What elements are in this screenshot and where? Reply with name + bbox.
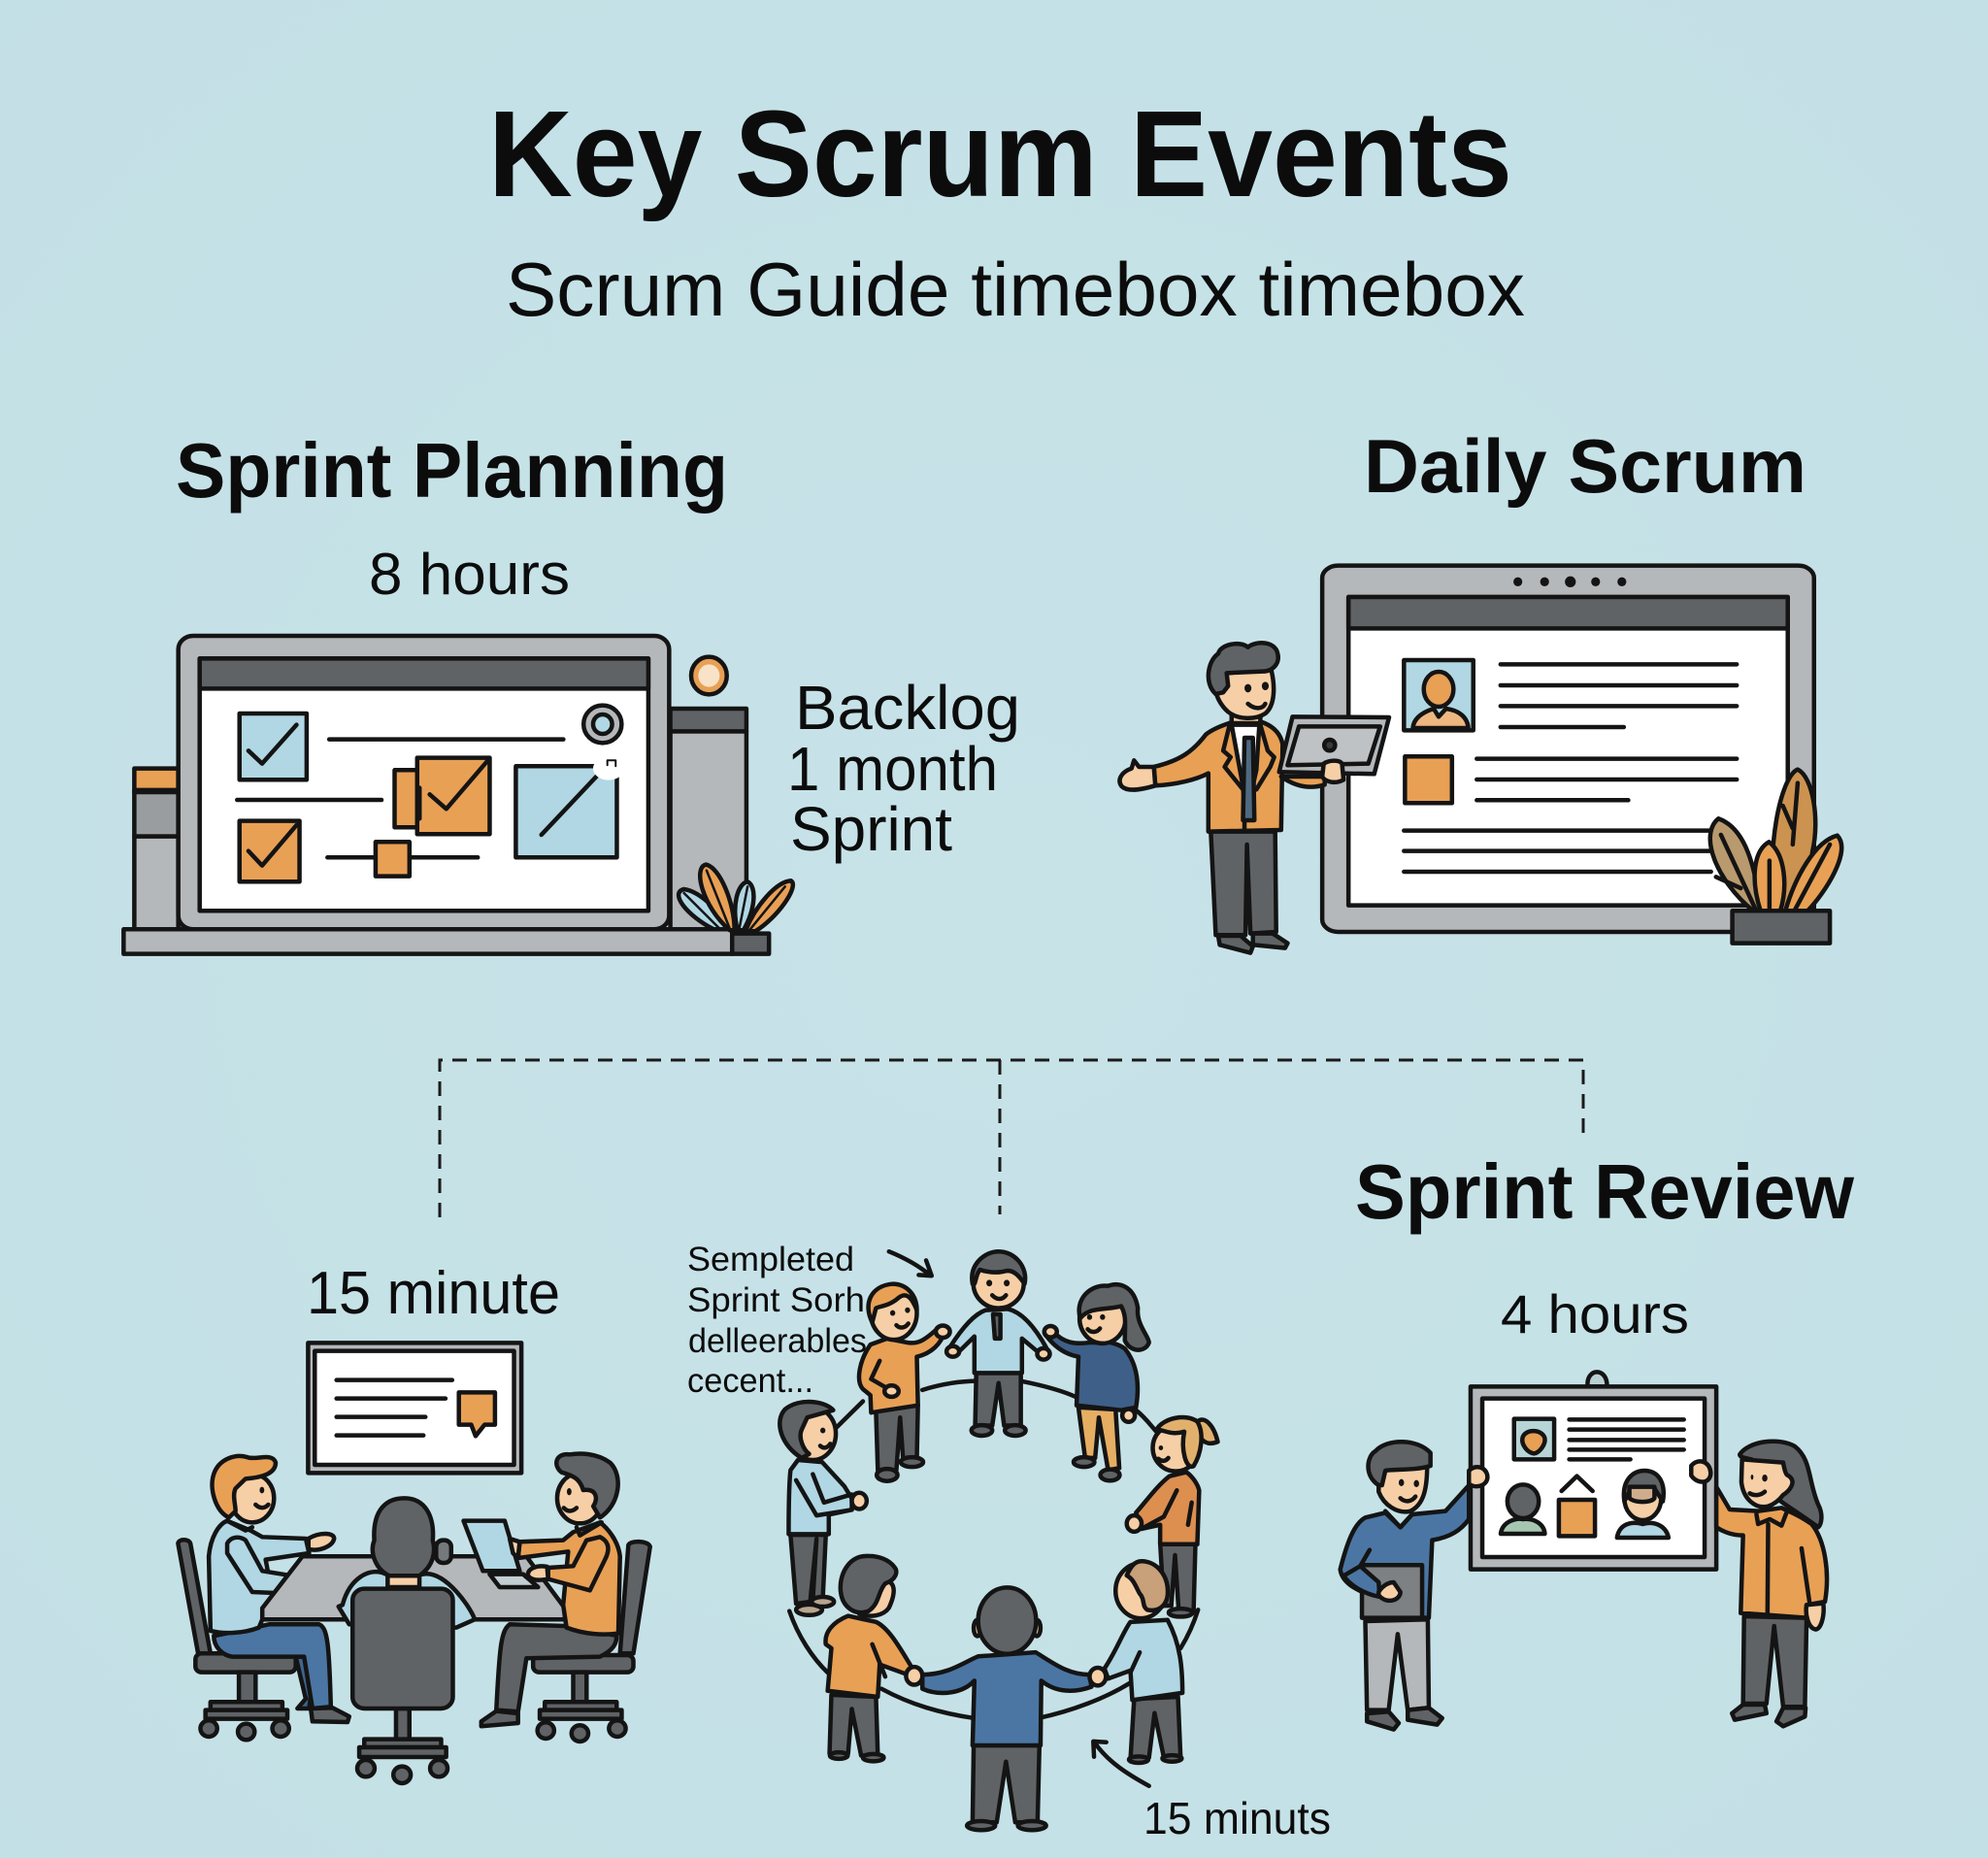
side label: Backlog 1 month Sprint: 1 month: [787, 734, 998, 804]
callout text: deliverables note: Sprint Sorh: [687, 1281, 865, 1319]
checked box orange: [240, 821, 300, 881]
illustration: Daily Scrum presenter and tablet: [1120, 566, 1841, 953]
tablet frame: [1322, 566, 1814, 932]
round ornament: [691, 657, 727, 694]
illustration: Sprint Review board: [1341, 1372, 1827, 1730]
tablet screen: [1348, 597, 1788, 906]
person: lower left orange: [825, 1556, 911, 1761]
callout text: 15 minuts: 15 minuts: [1143, 1793, 1331, 1843]
heading: Sprint Review: Sprint Review: [1355, 1148, 1855, 1235]
blue square with diagonal: [515, 757, 624, 857]
right chair: [533, 1542, 650, 1742]
text lines middle: [1476, 759, 1737, 800]
side label: Backlog 1 month Sprint: Backlog: [795, 673, 1020, 743]
plant: [679, 865, 793, 931]
person: right orange: [1127, 1417, 1217, 1616]
side label: Backlog 1 month Sprint: Sprint: [790, 794, 952, 864]
illustration: meeting at table: [178, 1343, 650, 1783]
title: Key Scrum Events: [488, 85, 1512, 222]
circle outline: [789, 1381, 1198, 1718]
right tower: [671, 709, 746, 929]
heading: Sprint Planning: Sprint Planning: [176, 427, 728, 514]
left chair: [178, 1540, 296, 1740]
list line: [237, 798, 381, 802]
timebox: 8 hours: 8 hours: [369, 542, 570, 607]
timebox: 4 hours: 4 hours: [1501, 1283, 1689, 1344]
potted plant: [1710, 770, 1841, 944]
person: upper left orange: [859, 1284, 950, 1481]
dashed connector: [440, 1060, 1583, 1217]
pointer line: [835, 1402, 863, 1429]
monitor screen: [200, 658, 648, 911]
side label: Backlog 1 month Sprint: [787, 673, 1020, 864]
presenter: [1120, 643, 1389, 953]
subtitle: Scrum Guide timebox timebox: [506, 247, 1525, 332]
person: bottom right light blue: [1105, 1561, 1182, 1763]
tablet camera dots: [1513, 577, 1626, 587]
arrow top: [889, 1251, 932, 1276]
desk base: [123, 929, 769, 954]
profile photo: [1404, 660, 1474, 730]
person: top centre: [946, 1251, 1050, 1436]
callout text: deliverables note: delleerables: [688, 1322, 867, 1360]
left person: [1341, 1442, 1487, 1730]
illustration: team circle: [779, 1251, 1217, 1830]
illustration: Sprint Planning monitor: [123, 636, 793, 954]
left shelf: [134, 769, 179, 929]
text lines lower: [1404, 831, 1711, 872]
callout text: deliverables note: [687, 1241, 867, 1400]
board hook: [1587, 1372, 1607, 1386]
orange overlapping checkbox: [395, 758, 489, 834]
person: upper right navy: [1044, 1284, 1149, 1480]
heading: Daily Scrum: Daily Scrum: [1364, 423, 1806, 509]
person: bottom centre blue: [906, 1587, 1106, 1830]
right person: [1691, 1442, 1827, 1726]
text lines upper: [1501, 664, 1737, 727]
checked box blue: [240, 713, 307, 780]
centre person with chair: [339, 1498, 475, 1783]
orange square: [1405, 756, 1452, 803]
board: [1471, 1386, 1716, 1570]
monitor frame: [179, 636, 669, 929]
slider: [327, 842, 478, 877]
right person: [481, 1453, 620, 1726]
callout text: deliverables note: Sempleted: [687, 1241, 854, 1278]
table: [262, 1556, 565, 1619]
arrow bottom: [1093, 1742, 1149, 1786]
timebox: 15 minute: 15 minute: [307, 1260, 560, 1327]
person: left blue: [779, 1402, 867, 1615]
laptop: [464, 1521, 538, 1587]
callout text: deliverables note: cecent...: [687, 1362, 813, 1400]
list line with ring: [329, 706, 621, 743]
left person: [209, 1456, 349, 1722]
wall board: [308, 1343, 521, 1473]
